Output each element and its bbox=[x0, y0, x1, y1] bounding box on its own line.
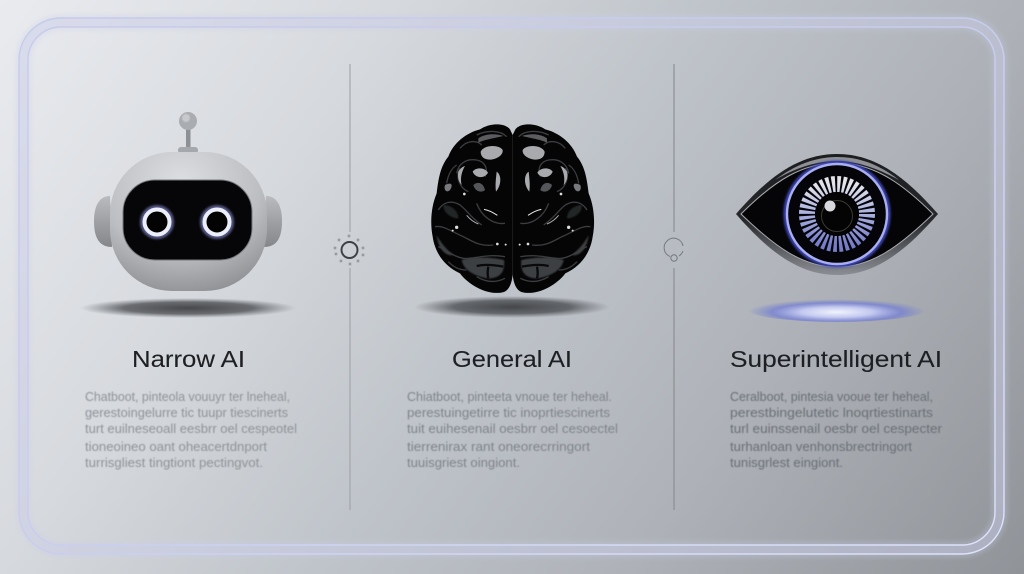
text block: Narrow AI description: Chatboot, pinteola vouuyr ter lneheal, bbox=[85, 390, 290, 404]
icon: glossy black brain bbox=[414, 124, 610, 318]
text block: Superintelligent AI description: Ceralboot, pintesia vooue ter heheal, bbox=[730, 390, 933, 404]
icon: eye with glowing iris bbox=[736, 154, 938, 322]
text block: General AI description: Chiatboot, pinteeta vnoue ter heheal. bbox=[407, 390, 612, 404]
icon: ring with dots bbox=[334, 235, 364, 265]
heading: Narrow AI: Narrow AI bbox=[132, 346, 245, 372]
text block: General AI description: tuit euihesenail oesbrr oel cesoectel bbox=[407, 422, 618, 436]
text block: General AI description: tuuisgriest oingiont. bbox=[407, 456, 520, 470]
text block: General AI description: perestuingetirre tic inoprtiescinerts bbox=[407, 406, 610, 420]
icon: open ring with small circle bbox=[664, 238, 683, 261]
robot eyes bbox=[140, 205, 234, 239]
text block: Narrow AI description bbox=[85, 390, 297, 470]
panel: Superintelligent AI bbox=[730, 154, 942, 470]
text block: Narrow AI description: tioneoineo oant oheacertdnport bbox=[85, 440, 268, 454]
panel: General AI bbox=[407, 124, 618, 470]
text block: Superintelligent AI description: turhanloan venhonsbrectringort bbox=[730, 440, 913, 454]
icon: robot head bbox=[80, 112, 296, 318]
heading: Superintelligent AI: Superintelligent AI bbox=[730, 346, 942, 372]
text block: General AI description: tierrenirax rant oneorecrringort bbox=[407, 440, 591, 454]
iris bbox=[787, 164, 887, 264]
text block: Narrow AI description: gerestoingelurre tic tuupr tiescinerts bbox=[85, 406, 288, 420]
text block: General AI description bbox=[407, 390, 618, 470]
text block: Superintelligent AI description: turl euinssenail oesbr oel cespecter bbox=[730, 422, 942, 436]
divider right with icon bbox=[664, 64, 683, 510]
text block: Superintelligent AI description bbox=[730, 390, 942, 470]
text block: Narrow AI description: turrisgliest tingtiont pectingvot. bbox=[85, 456, 263, 470]
text block: Narrow AI description: turt euilneseoall eesbrr oel cespeotel bbox=[85, 422, 297, 436]
panel: Narrow AI bbox=[80, 112, 297, 470]
text block: Superintelligent AI description: perestbingelutetic lnoqrtiestinarts bbox=[730, 406, 933, 420]
heading: General AI: General AI bbox=[452, 346, 572, 372]
divider left with icon bbox=[334, 64, 364, 510]
text block: Superintelligent AI description: tunisgrlest eingiont. bbox=[730, 456, 843, 470]
